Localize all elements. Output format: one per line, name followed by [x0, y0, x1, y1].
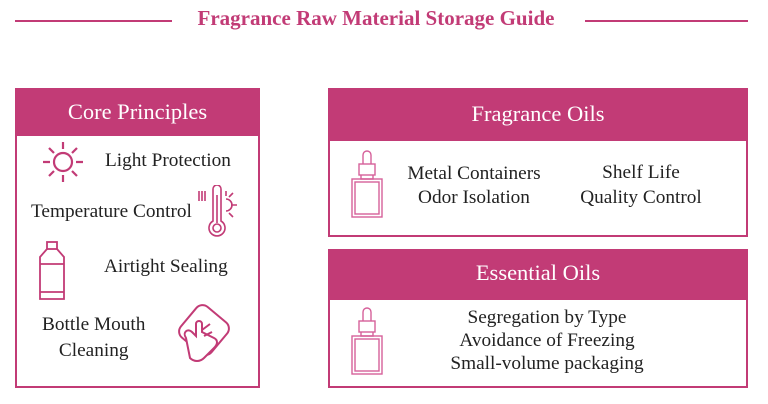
- icon: dropper bottle: [351, 307, 383, 375]
- heading: core principles: Core Principles: [68, 99, 207, 124]
- text: metal containers / odor isolation: [407, 163, 541, 208]
- text: temperature control: Temperature Control: [31, 201, 192, 222]
- text: shelf life / quality control: [580, 162, 702, 208]
- panel: fragrance oils: [328, 88, 748, 237]
- heading: fragrance oils: Fragrance Oils: [471, 101, 605, 126]
- heading: essential oils: [330, 251, 746, 300]
- text: essential oil points: Segregation by Type: [468, 307, 626, 328]
- text: bottle mouth cleaning: [42, 314, 146, 361]
- icon: hand cleaning: [178, 304, 230, 362]
- panel: core principles: [15, 88, 260, 388]
- heading: fragrance oils: [330, 90, 746, 141]
- text: shelf life / quality control: Quality Control: [580, 187, 702, 208]
- text: essential oil points: Small-volume packaging: [450, 353, 644, 374]
- icon: thermometer: [198, 185, 237, 237]
- text: bottle mouth cleaning: Cleaning: [59, 340, 128, 361]
- text: essential oil points: Avoidance of Freezing: [459, 330, 635, 351]
- text: light protection: Light Protection: [105, 150, 231, 171]
- text: shelf life / quality control: Shelf Life: [602, 162, 680, 183]
- text: airtight sealing: Airtight Sealing: [104, 256, 228, 277]
- title: Fragrance Raw Material Storage Guide: [198, 6, 554, 30]
- panel: essential oils: [328, 249, 748, 388]
- text: metal containers / odor isolation: Metal Containers: [407, 163, 541, 184]
- text: essential oil points: [450, 307, 644, 374]
- icon: dropper bottle: [351, 150, 383, 218]
- heading: essential oils: Essential Oils: [476, 260, 600, 285]
- text: metal containers / odor isolation: Odor Isolation: [418, 187, 530, 208]
- heading: core principles: [17, 90, 258, 136]
- icon: bottle: [39, 241, 65, 300]
- icon: sun: [43, 142, 83, 182]
- text: bottle mouth cleaning: Bottle Mouth: [42, 314, 145, 335]
